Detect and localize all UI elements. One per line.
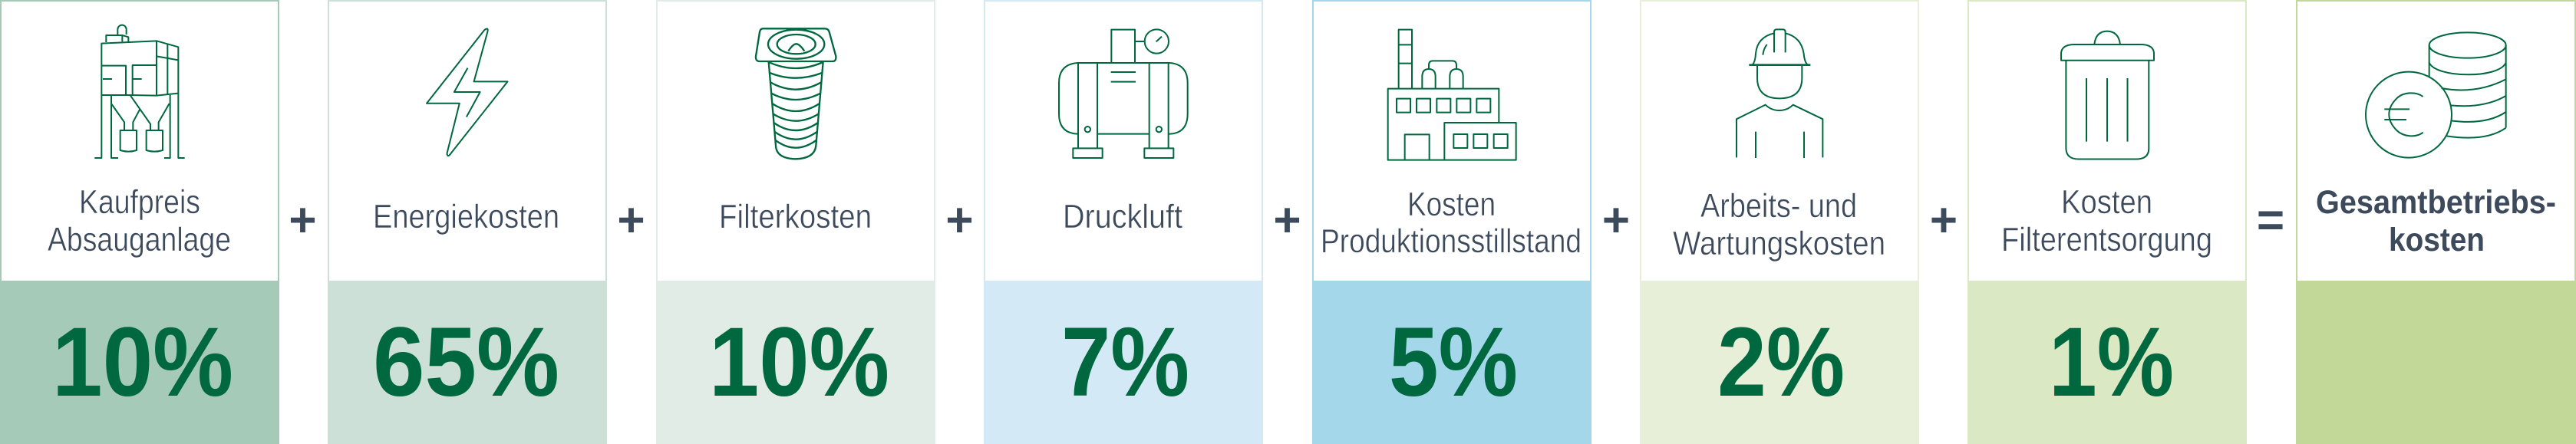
panel: Kosten Produktionsstillstand	[1312, 1, 1591, 444]
label: Gesamtbetriebs-kosten	[2316, 184, 2556, 258]
label: Arbeits- und Wartungskosten: Wartungskosten	[1673, 225, 1885, 262]
value: 7%: 7%	[1061, 308, 1189, 417]
panel: Kosten Filterentsorgung	[1967, 1, 2247, 444]
value: 10%: 10%	[709, 308, 889, 417]
value: 10%: 10%	[52, 308, 233, 417]
label: Kosten Produktionsstillstand: Kosten	[1407, 186, 1496, 223]
operator: plus: +	[289, 194, 317, 247]
icon: compressor	[1059, 29, 1188, 158]
label: Kaufpreis Absauganlage: Absauganlage	[48, 221, 231, 258]
operator: plus: +	[1602, 194, 1630, 247]
icon: dust extraction unit	[94, 25, 185, 158]
panel: Kaufpreis Absauganlage	[0, 1, 279, 444]
icon: factory	[1388, 30, 1516, 160]
icon: filter cartridge	[756, 28, 836, 159]
panel: Druckluft	[984, 1, 1263, 444]
icon: euro coins	[2366, 32, 2506, 158]
value: 2%: 2%	[1717, 308, 1845, 417]
label: Kosten Filterentsorgung	[2001, 183, 2212, 258]
value: 5%: 5%	[1389, 308, 1518, 417]
label: Filterkosten: Filterkosten	[719, 198, 872, 235]
label: Gesamtbetriebs-kosten: Gesamtbetriebs-	[2316, 184, 2556, 221]
value: 65%: 65%	[373, 308, 559, 417]
label: Kosten Produktionsstillstand	[1321, 186, 1582, 260]
label: Druckluft: Druckluft	[1063, 198, 1182, 235]
label: Kosten Produktionsstillstand: Produktionsstillstand	[1321, 222, 1582, 260]
label: Energiekosten: Energiekosten	[373, 198, 559, 235]
label: Kosten Filterentsorgung: Kosten	[2061, 183, 2152, 221]
operator: plus: +	[1273, 194, 1301, 247]
panel: Filterkosten	[656, 1, 935, 444]
label: Gesamtbetriebs-kosten: kosten	[2389, 222, 2485, 258]
label: Arbeits- und Wartungskosten	[1673, 187, 1885, 262]
icon: lightning bolt	[427, 29, 508, 156]
operator: plus: +	[1930, 194, 1958, 247]
icon: worker with hard hat	[1737, 29, 1822, 158]
panel: Energiekosten	[328, 1, 607, 444]
panel: Gesamtbetriebskosten	[2296, 1, 2576, 444]
label: Kaufpreis Absauganlage	[48, 183, 231, 258]
icon: waste bin	[2061, 31, 2154, 159]
label: Arbeits- und Wartungskosten: Arbeits- und	[1700, 187, 1857, 225]
label: Kosten Filterentsorgung: Filterentsorgung	[2001, 221, 2212, 258]
operator: equals: =	[2257, 194, 2284, 247]
label: Kaufpreis Absauganlage: Kaufpreis	[79, 183, 200, 221]
panel: Arbeits- und Wartungskosten	[1640, 1, 1919, 444]
operator: plus: +	[945, 194, 974, 247]
value: 1%: 1%	[2049, 308, 2174, 417]
operator: plus: +	[617, 194, 645, 247]
